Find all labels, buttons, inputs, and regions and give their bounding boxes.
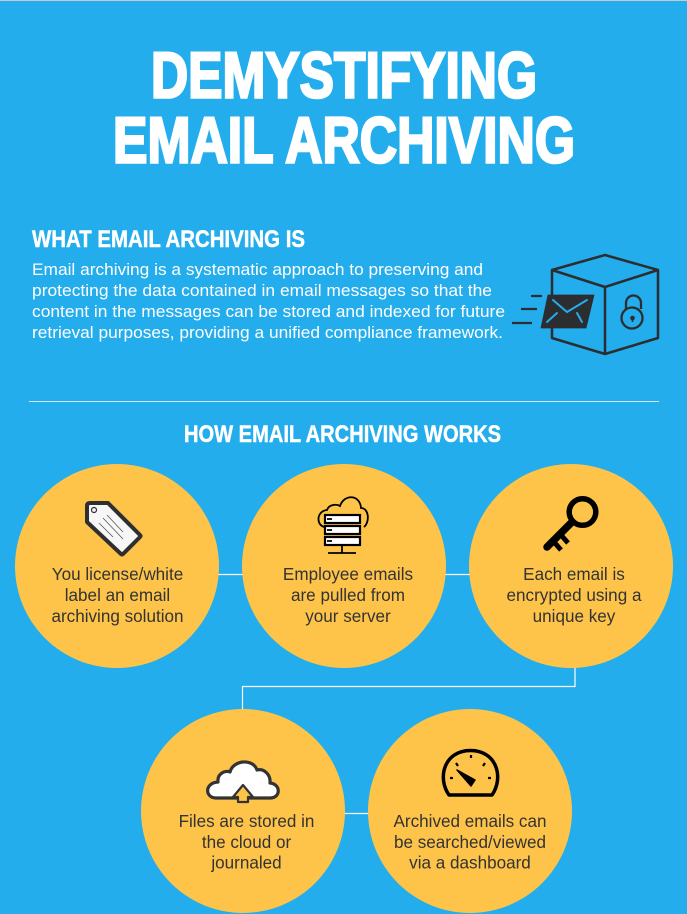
step 1 text: label an email (65, 586, 170, 605)
step 3: encryption (469, 464, 673, 668)
step 1: license (15, 464, 219, 668)
text block: definition: Email archiving is a systematic approach to preserving and (32, 261, 483, 279)
step 5 text: Archived emails can (394, 812, 546, 831)
icon: key (547, 499, 596, 550)
step 1 text (51, 565, 184, 626)
title: EMAIL ARCHIVING (113, 104, 575, 176)
step 5 text (394, 812, 546, 872)
text block: definition: retrieval purposes, providing a unified compliance framework. (32, 324, 503, 342)
step 4 text: Files are stored in (179, 812, 314, 831)
heading: what email archiving is: WHAT EMAIL ARCHIVING IS (32, 226, 305, 253)
step 2: pull emails (242, 464, 446, 668)
text block: definition (32, 261, 505, 342)
icon: archive box with envelope and lock (512, 255, 658, 354)
title (113, 40, 575, 176)
text block: definition: protecting the data contained in email messages so that the (32, 282, 492, 300)
step 4 text: journaled (210, 854, 282, 872)
icon: cloud server (318, 497, 368, 553)
step 2 text (283, 565, 413, 626)
icon: price tag (87, 503, 140, 554)
connector lines between steps (215, 574, 575, 814)
step 5 text: via a dashboard (409, 854, 531, 872)
step 3 text (507, 565, 642, 626)
icon: cloud upload (208, 762, 278, 802)
step 3 text: unique key (533, 607, 616, 626)
step 5: dashboard (368, 709, 572, 913)
step 1 text: You license/white (52, 565, 183, 584)
title: DEMYSTIFYING (151, 40, 537, 112)
icon: speedometer (443, 750, 498, 795)
heading: how email archiving works: HOW EMAIL ARCHIVING WORKS (184, 421, 501, 448)
step 2 text: Employee emails (283, 565, 413, 584)
step 2 text: your server (305, 607, 391, 626)
step 1 text: archiving solution (51, 607, 184, 626)
step 5 text: be searched/viewed (394, 833, 546, 852)
step 4 text (179, 812, 314, 872)
step 4 text: the cloud or (202, 833, 291, 852)
step 3 text: Each email is (523, 565, 625, 584)
step 4: storage (141, 709, 345, 913)
step 2 text: are pulled from (291, 586, 405, 605)
text block: definition: content in the messages can be stored and indexed for future (32, 303, 505, 321)
step 3 text: encrypted using a (507, 586, 642, 605)
